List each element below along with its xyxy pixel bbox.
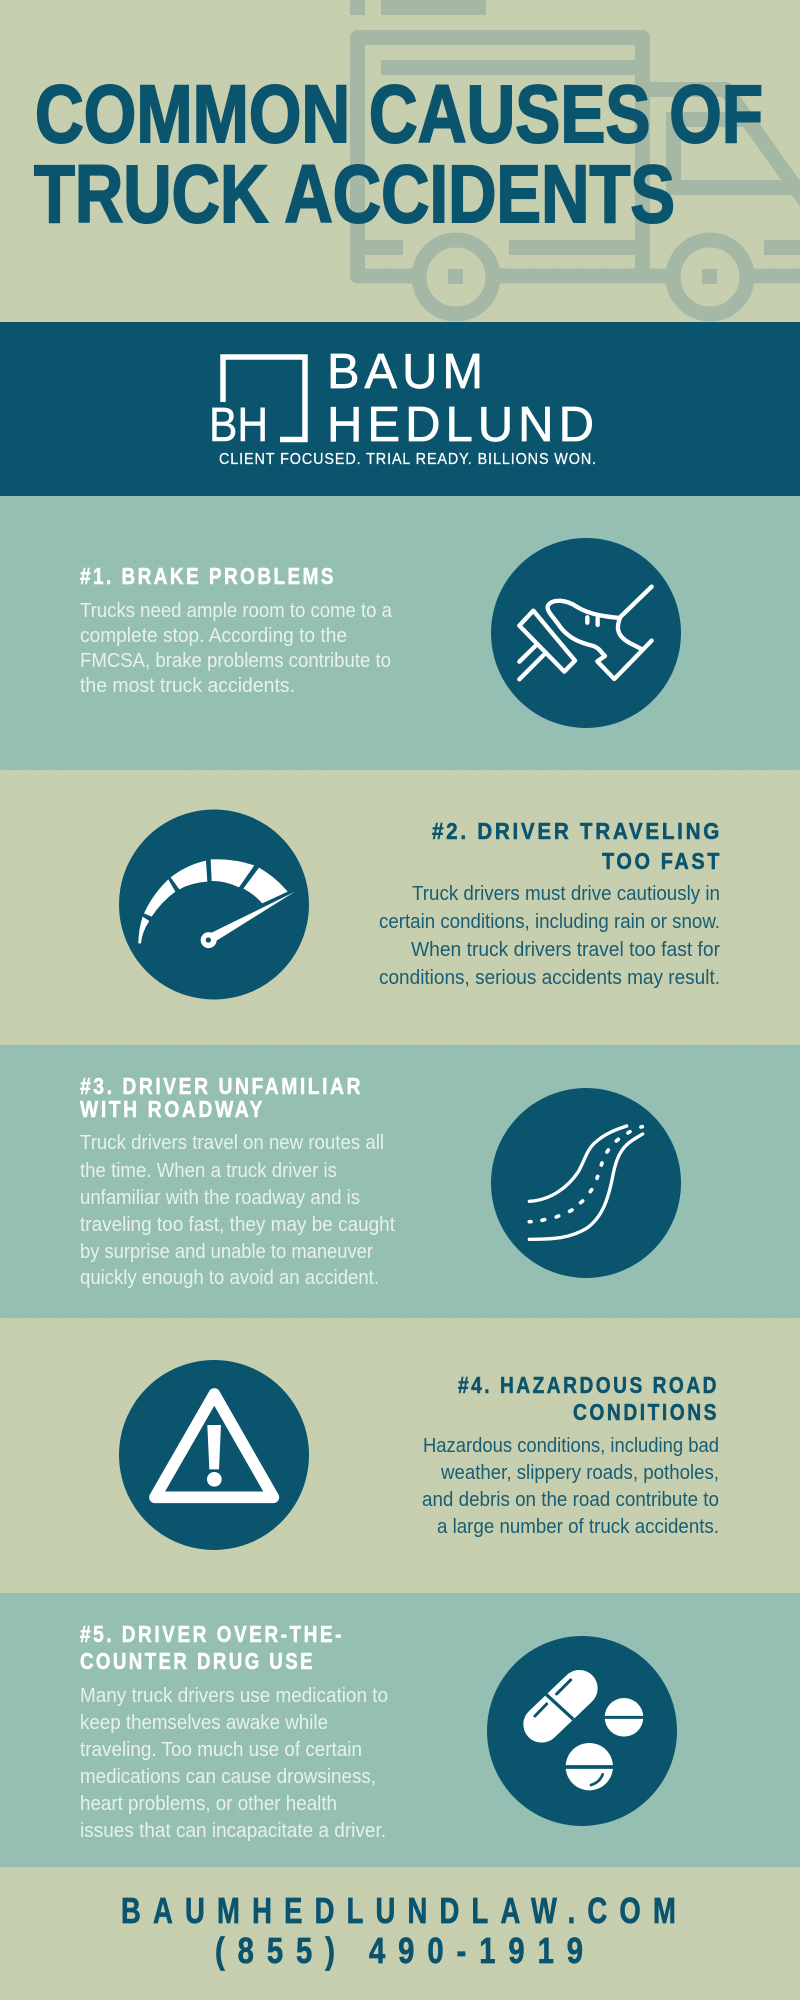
panel: title header [0,0,800,322]
text block 2 [379,882,720,989]
text block 5: keep themselves awake while [80,1711,328,1734]
text block 3: unfamiliar with the roadway and is [80,1186,360,1209]
text block 3: quickly enough to avoid an accident. [80,1266,379,1289]
text block 2: certain conditions, including rain or snow. [379,910,720,933]
text block 4: weather, slippery roads, potholes, [440,1461,719,1484]
panel: #2 driver traveling too fast [0,770,800,1045]
text block 2: When truck drivers travel too fast for [411,938,720,961]
icon: foot on brake pedal [491,538,681,728]
heading 5: #5. DRIVER OVER-THE- [80,1621,344,1647]
heading 2 [432,818,722,874]
icon: warning triangle [119,1360,309,1550]
panel: #5 driver over-the-counter drug use [0,1593,800,1867]
logo wordmark: BAUM [327,345,488,399]
text block 4: Hazardous conditions, including bad [423,1434,719,1457]
logo wordmark [327,345,599,452]
text block 3: Truck drivers travel on new routes all [80,1131,384,1154]
text block 1: Trucks need ample room to come to a [80,599,393,622]
heading 4: CONDITIONS [573,1399,719,1425]
panel: #4 hazardous road conditions [0,1318,800,1593]
logo wordmark: HEDLUND [327,398,599,452]
panel: #3 driver unfamiliar with roadway [0,1045,800,1318]
heading 4: #4. HAZARDOUS ROAD [458,1372,719,1398]
heading 2: TOO FAST [602,848,722,874]
text block 1 [80,599,393,697]
text block 1: FMCSA, brake problems contribute to [80,649,391,672]
title [34,69,763,240]
text block 3: by surprise and unable to maneuver [80,1240,373,1263]
tagline: CLIENT FOCUSED. TRIAL READY. BILLIONS WON. [219,451,597,468]
heading 4 [458,1372,719,1425]
text block 4: a large number of truck accidents. [437,1515,719,1538]
text block 3: traveling too fast, they may be caught [80,1213,395,1236]
icon: truck watermark [358,0,800,314]
text block 2: conditions, serious accidents may result. [379,966,720,989]
panel: footer contact [0,1867,800,2000]
text block 2: Truck drivers must drive cautiously in [412,882,720,905]
text block 5 [80,1684,388,1842]
icon: winding road [491,1088,681,1278]
heading 5: COUNTER DRUG USE [80,1648,315,1674]
title: TRUCK ACCIDENTS [34,149,675,240]
text block 5: traveling. Too much use of certain [80,1738,362,1761]
phone number: (855) 490-1919 [215,1930,596,1971]
text block 4 [422,1434,719,1538]
heading 1: #1. BRAKE PROBLEMS [80,563,336,589]
heading 3: #3. DRIVER UNFAMILIAR [80,1073,363,1099]
text block 4: and debris on the road contribute to [422,1488,719,1511]
heading 3 [80,1073,363,1122]
heading 2: #2. DRIVER TRAVELING [432,818,722,844]
icon: BH logo mark: BH [209,399,268,452]
text block 1: complete stop. According to the [80,624,347,647]
text block 5: Many truck drivers use medication to [80,1684,388,1707]
icon: BH logo mark [209,357,305,452]
icon: speedometer [119,810,309,1000]
text block 5: medications can cause drowsiness, [80,1765,376,1788]
text block 3: the time. When a truck driver is [80,1159,337,1182]
text block 3 [80,1131,395,1289]
text block 5: issues that can incapacitate a driver. [80,1819,386,1842]
heading 5 [80,1621,344,1674]
text block 5: heart problems, or other health [80,1792,337,1815]
panel: #1 brake problems [0,496,800,770]
panel: logo banner [0,322,800,496]
text block 1: the most truck accidents. [80,674,295,697]
heading 3: WITH ROADWAY [80,1096,265,1122]
icon: pills [487,1636,677,1826]
